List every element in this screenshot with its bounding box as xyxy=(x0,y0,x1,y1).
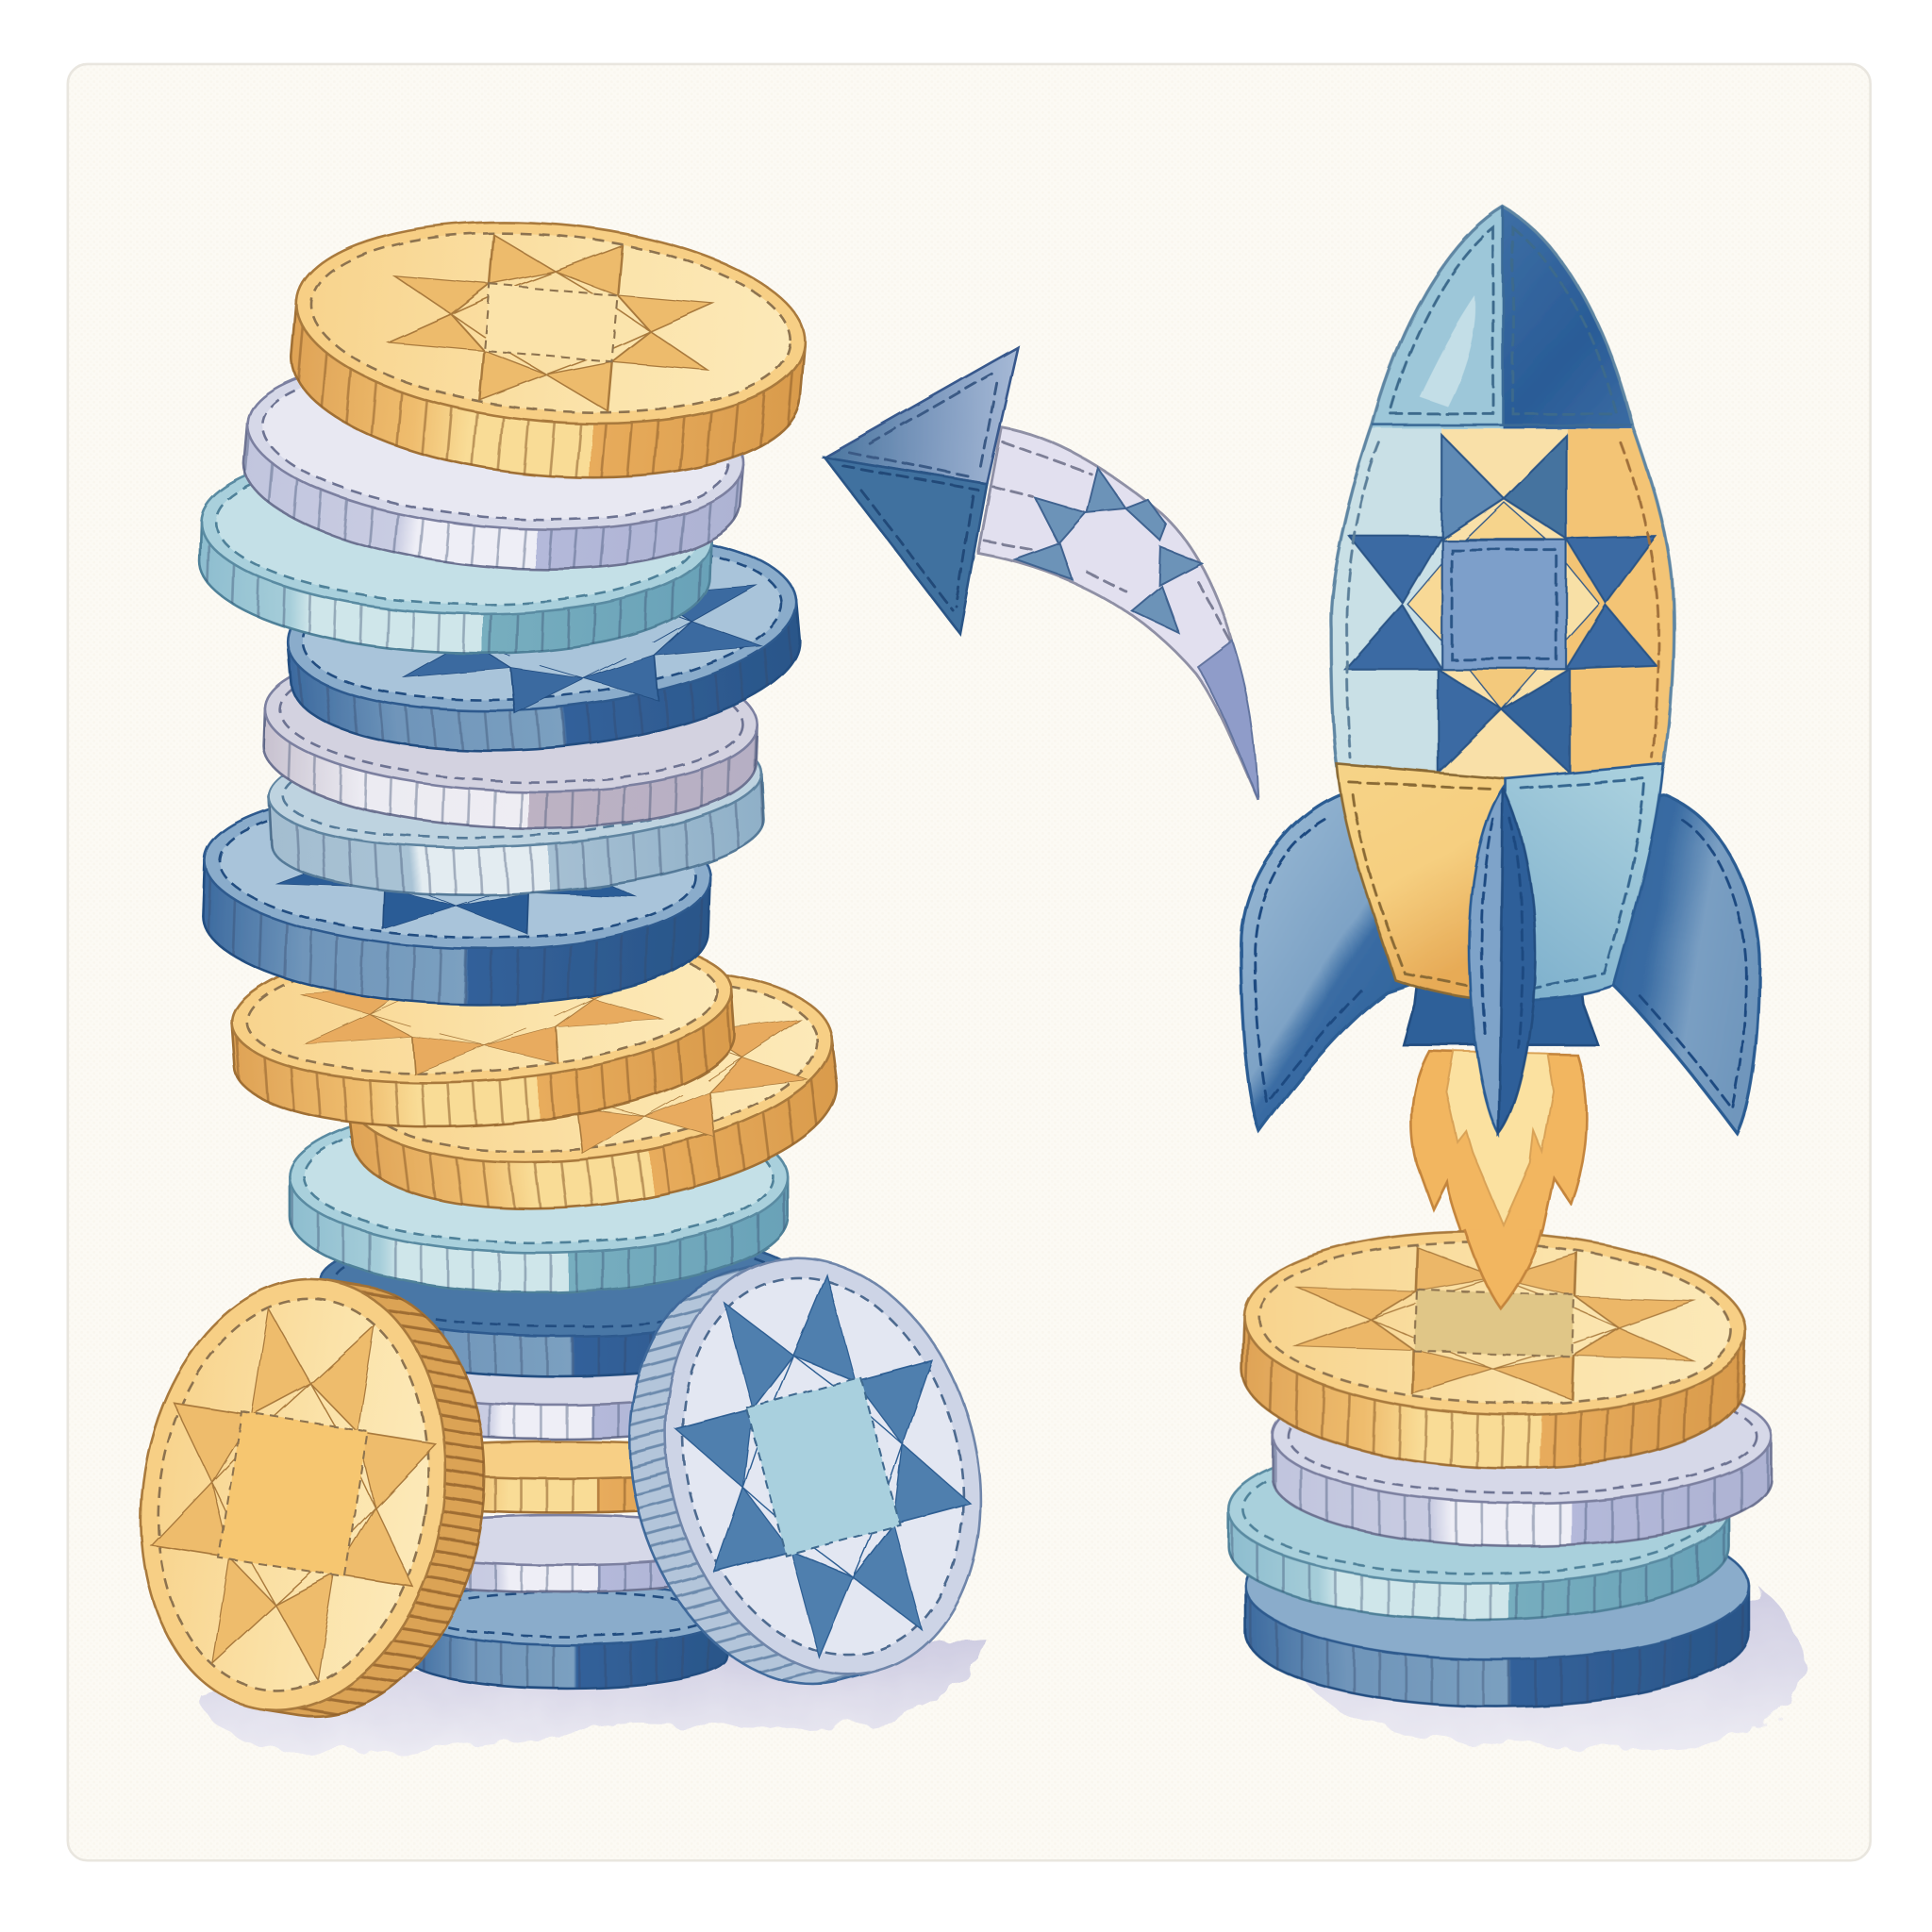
arrow shaft xyxy=(978,427,1258,800)
arrow shaft star patches xyxy=(1015,468,1201,633)
nose left patch xyxy=(1372,208,1504,429)
coin: gold with star xyxy=(1239,1224,1749,1476)
flame xyxy=(1411,1051,1587,1308)
arrow stitching xyxy=(985,442,1232,644)
coin: lavender xyxy=(1273,1368,1771,1546)
rocket centre fin xyxy=(1470,789,1536,1134)
flame tip over coin xyxy=(1465,1230,1541,1308)
rocket body upper xyxy=(1329,204,1676,777)
coin: upper teal xyxy=(197,437,714,662)
rocket right fin xyxy=(1565,794,1759,1134)
arrowhead upper patch xyxy=(824,347,1018,484)
arrow tail patch xyxy=(1198,641,1258,800)
arrowhead stitching xyxy=(849,371,997,476)
coin: top gold with star xyxy=(283,203,813,497)
coin: lavender xyxy=(370,1351,740,1440)
nose highlight xyxy=(1420,295,1475,407)
coin: pale blue xyxy=(266,710,767,906)
shadow: right coin stack xyxy=(1293,1590,1801,1748)
rocket xyxy=(1241,197,1759,1308)
seams xyxy=(1373,207,1633,425)
coin: upper lavender xyxy=(237,339,751,588)
coin: leaning blue xyxy=(585,1222,1025,1720)
rocket nozzle xyxy=(1404,983,1598,1045)
band centre patch xyxy=(1441,429,1567,786)
coin: navy with star xyxy=(200,780,712,1013)
coin: right gold xyxy=(336,944,848,1234)
body outline xyxy=(1330,207,1674,780)
coin: lower teal xyxy=(290,1100,788,1292)
body stitching xyxy=(1390,228,1617,414)
arrowhead lower patch xyxy=(824,458,987,633)
coin: upper navy with star xyxy=(280,514,808,770)
coin: base navy xyxy=(1245,1512,1748,1707)
arrow: quilted curved arrow xyxy=(824,347,1258,800)
coin: grey lavender xyxy=(375,1516,745,1592)
coin: left gold xyxy=(227,915,740,1142)
rocket lower left patch xyxy=(1337,764,1506,1001)
coin: lower navy xyxy=(321,1226,801,1376)
band left patch xyxy=(1306,429,1444,786)
lower body stitching xyxy=(1349,782,1491,986)
arrowhead lower stitching xyxy=(842,466,978,610)
right coin stack xyxy=(1228,1224,1771,1707)
centre square stitching xyxy=(1452,550,1557,659)
band right patch xyxy=(1566,428,1674,773)
shadow: left coin stack xyxy=(204,1639,986,1752)
quilt star block xyxy=(1345,435,1656,773)
coin: teal xyxy=(1228,1436,1728,1621)
left coin stack xyxy=(111,203,1025,1739)
coin: bottom navy xyxy=(407,1583,727,1688)
nose right patch xyxy=(1503,208,1632,430)
coin: leaning gold xyxy=(111,1257,514,1739)
rocket left fin xyxy=(1241,794,1441,1131)
rocket lower right patch xyxy=(1506,764,1663,1001)
coin: small gold xyxy=(375,1441,745,1513)
coin: grey lavender upper xyxy=(261,635,760,837)
